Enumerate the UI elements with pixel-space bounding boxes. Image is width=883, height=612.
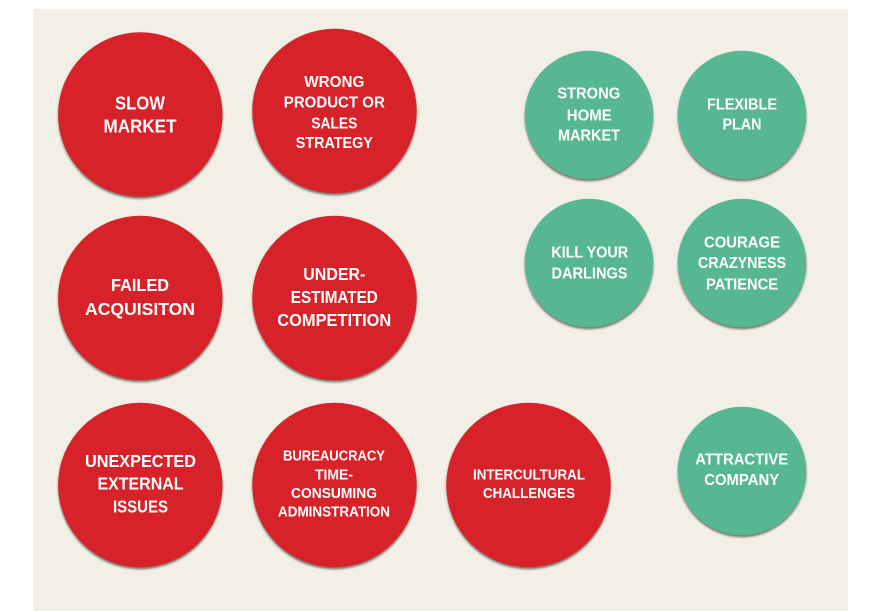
green circle: courage crazyness patience: CRAZYNESS: [698, 255, 786, 272]
green circle: kill your darlings: DARLINGS: [552, 266, 628, 283]
red circle: unexpected external issues: UNEXPECTED: [85, 451, 196, 471]
red circle: failed acquisiton: FAILED: [111, 275, 169, 295]
red circle: wrong product or sales strategy: WRONG: [304, 74, 364, 91]
red circle: under-estimated competition: ESTIMATED: [291, 287, 378, 307]
red circle: wrong product or sales strategy: PRODUCT OR: [284, 94, 385, 111]
green circle: strong home market: HOME: [567, 108, 612, 125]
green circle: attractive company: ATTRACTIVE: [695, 451, 788, 468]
green circle: courage crazyness patience: COURAGE: [704, 235, 780, 252]
red circle: under-estimated competition: UNDER-: [303, 264, 365, 284]
green circle: kill your darlings: KILL YOUR: [551, 244, 628, 261]
red circle: slow market: MARKET: [104, 116, 176, 136]
green circle: attractive company: [678, 407, 806, 535]
red circle: slow market: [58, 32, 222, 197]
red circle: under-estimated competition: [252, 216, 417, 380]
red circle: unexpected external issues: [58, 403, 222, 567]
green circle: kill your darlings: [525, 199, 653, 327]
green circle: flexible plan: PLAN: [722, 117, 762, 134]
red circle: intercultural challenges: INTERCULTURAL: [473, 467, 585, 483]
red circle: failed acquisiton: ACQUISITON: [85, 299, 195, 319]
red circle: bureaucracy time-consuming adminstration: BUREAUCRACY: [283, 448, 385, 464]
red circle: wrong product or sales strategy: SALES: [311, 115, 358, 132]
green circle: strong home market: [525, 51, 653, 179]
green circle: attractive company: COMPANY: [704, 472, 780, 489]
green circle: flexible plan: [678, 51, 806, 179]
red circle: bureaucracy time-consuming adminstration: CONSUMING: [291, 486, 377, 502]
red circle: wrong product or sales strategy: [252, 29, 417, 193]
red circle: unexpected external issues: EXTERNAL: [98, 473, 184, 493]
red circle: intercultural challenges: [446, 403, 611, 567]
green circle: flexible plan: FLEXIBLE: [707, 97, 777, 114]
green circle: strong home market: MARKET: [558, 127, 620, 144]
green circle: courage crazyness patience: PATIENCE: [706, 277, 778, 294]
red circle: unexpected external issues: ISSUES: [113, 496, 168, 516]
red circle: under-estimated competition: COMPETITION: [277, 310, 391, 330]
green circle: strong home market: STRONG: [557, 86, 620, 103]
red circle: failed acquisiton: [58, 216, 222, 380]
red circle: wrong product or sales strategy: STRATEGY: [296, 135, 373, 152]
red circle: bureaucracy time-consuming adminstration: [252, 403, 417, 567]
red circle: intercultural challenges: CHALLENGES: [483, 486, 575, 502]
red circle: slow market: SLOW: [115, 93, 165, 113]
red circle: bureaucracy time-consuming adminstration: TIME-: [315, 467, 353, 483]
red circle: bureaucracy time-consuming adminstration: ADMINSTRATION: [278, 504, 390, 520]
green circle: courage crazyness patience: [678, 199, 806, 327]
